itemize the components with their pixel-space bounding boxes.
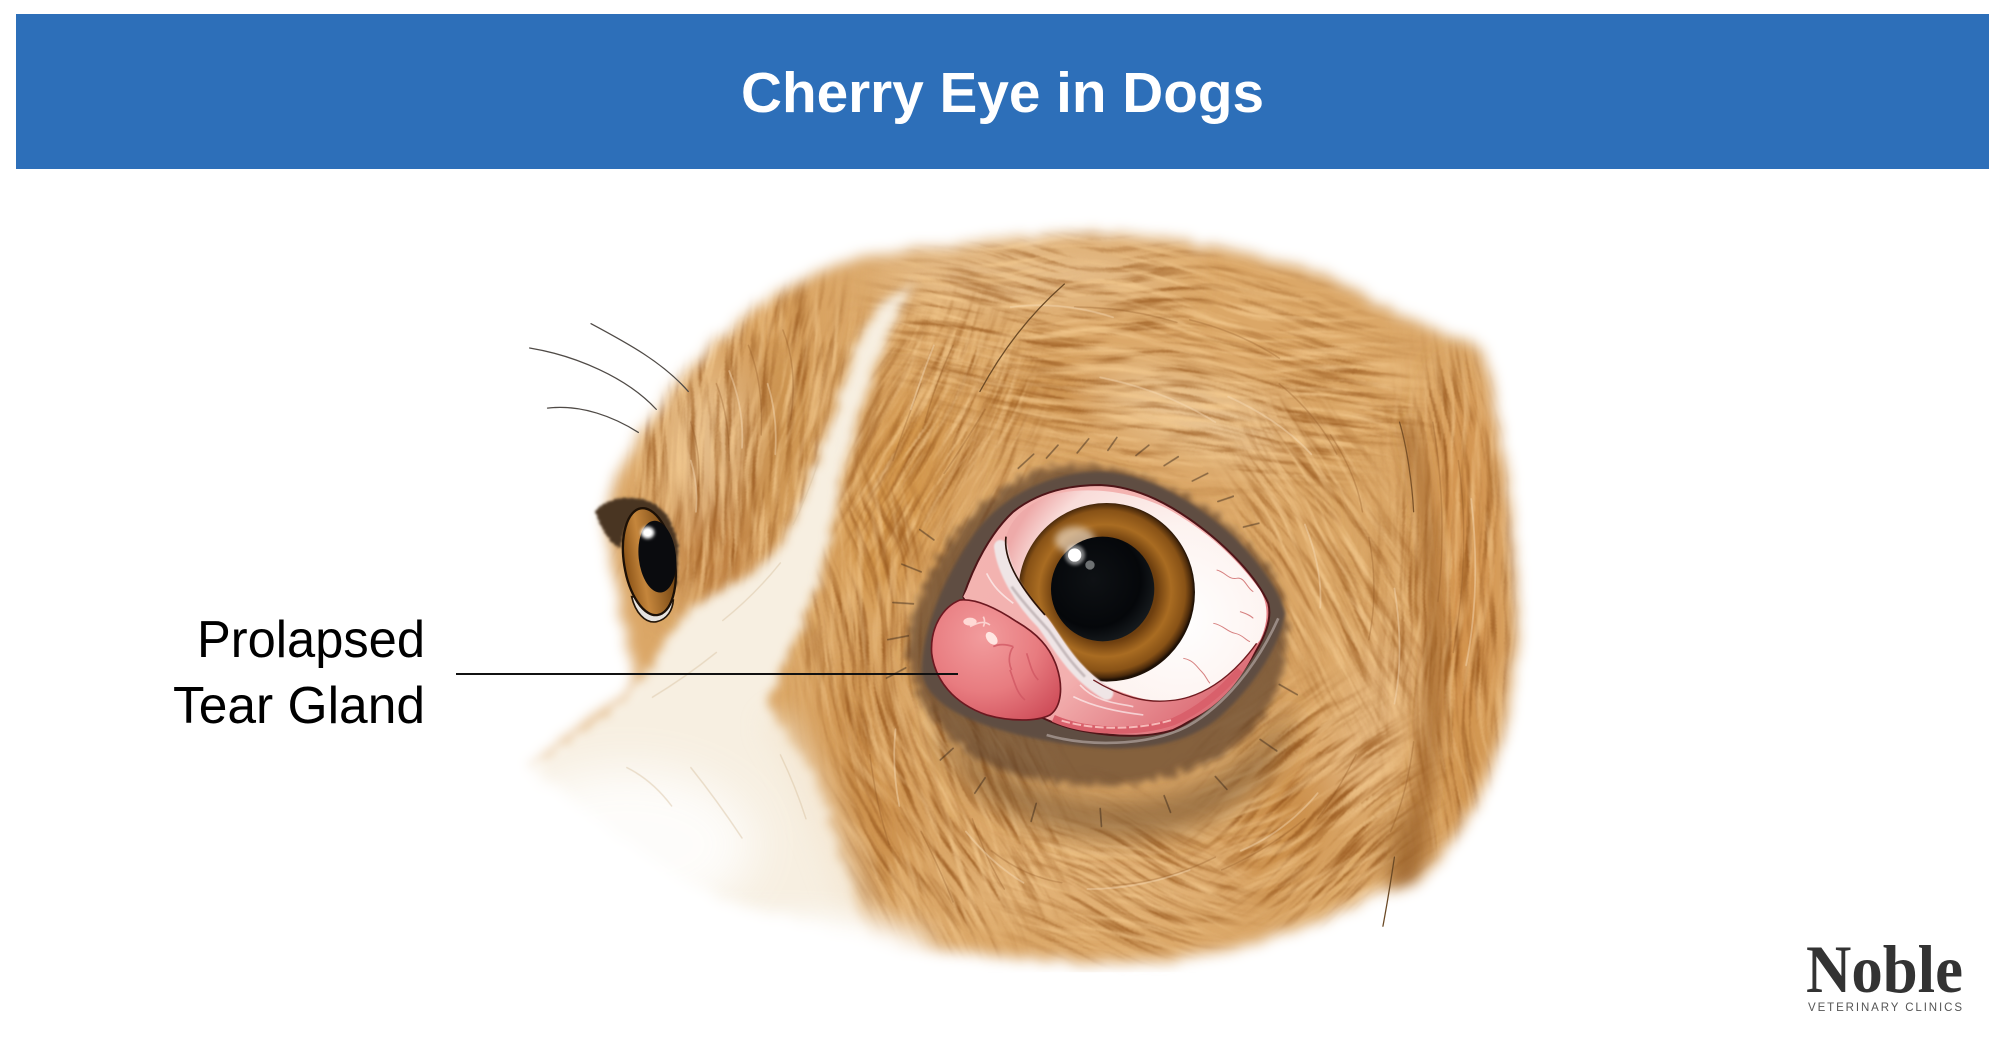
dog head fur xyxy=(528,222,1528,972)
leader line xyxy=(456,673,958,675)
highlight xyxy=(641,527,654,539)
white blaze and muzzle xyxy=(499,284,934,975)
right eye with cherry eye xyxy=(922,472,1285,748)
prolapsed gland xyxy=(932,600,1061,720)
brow tuft xyxy=(595,498,678,587)
iris xyxy=(616,504,683,619)
fur strands xyxy=(627,305,1475,902)
sclera veins xyxy=(1183,570,1253,683)
eyelid rim xyxy=(922,472,1285,748)
iris xyxy=(1018,503,1195,682)
shadow around the eye xyxy=(906,466,1295,838)
pupil xyxy=(1051,537,1154,641)
iris haze xyxy=(1055,527,1095,553)
logo: VETERINARY CLINICS xyxy=(1808,1002,1962,1014)
lower lid band xyxy=(1053,670,1240,730)
callout label xyxy=(173,611,425,735)
sclera xyxy=(1005,490,1267,702)
title: Cherry Eye in Dogs xyxy=(741,61,1264,125)
callout label: Prolapsed xyxy=(197,611,425,669)
fur texture zones xyxy=(636,234,1518,962)
dark lashes around the eye xyxy=(887,438,1297,826)
pupil xyxy=(635,519,680,594)
lower lid xyxy=(632,597,673,622)
illustration: dog head with cherry eye xyxy=(456,222,1528,972)
highlights xyxy=(1065,545,1095,570)
header banner xyxy=(16,14,1989,169)
whiskers xyxy=(530,284,1414,926)
conjunctiva xyxy=(963,485,1269,736)
logo: Noble xyxy=(1806,931,1963,1007)
ear fold shading xyxy=(1383,416,1444,899)
third eyelid membrane xyxy=(963,527,1260,730)
left dog eye xyxy=(595,498,683,622)
callout label: Tear Gland xyxy=(173,677,425,735)
